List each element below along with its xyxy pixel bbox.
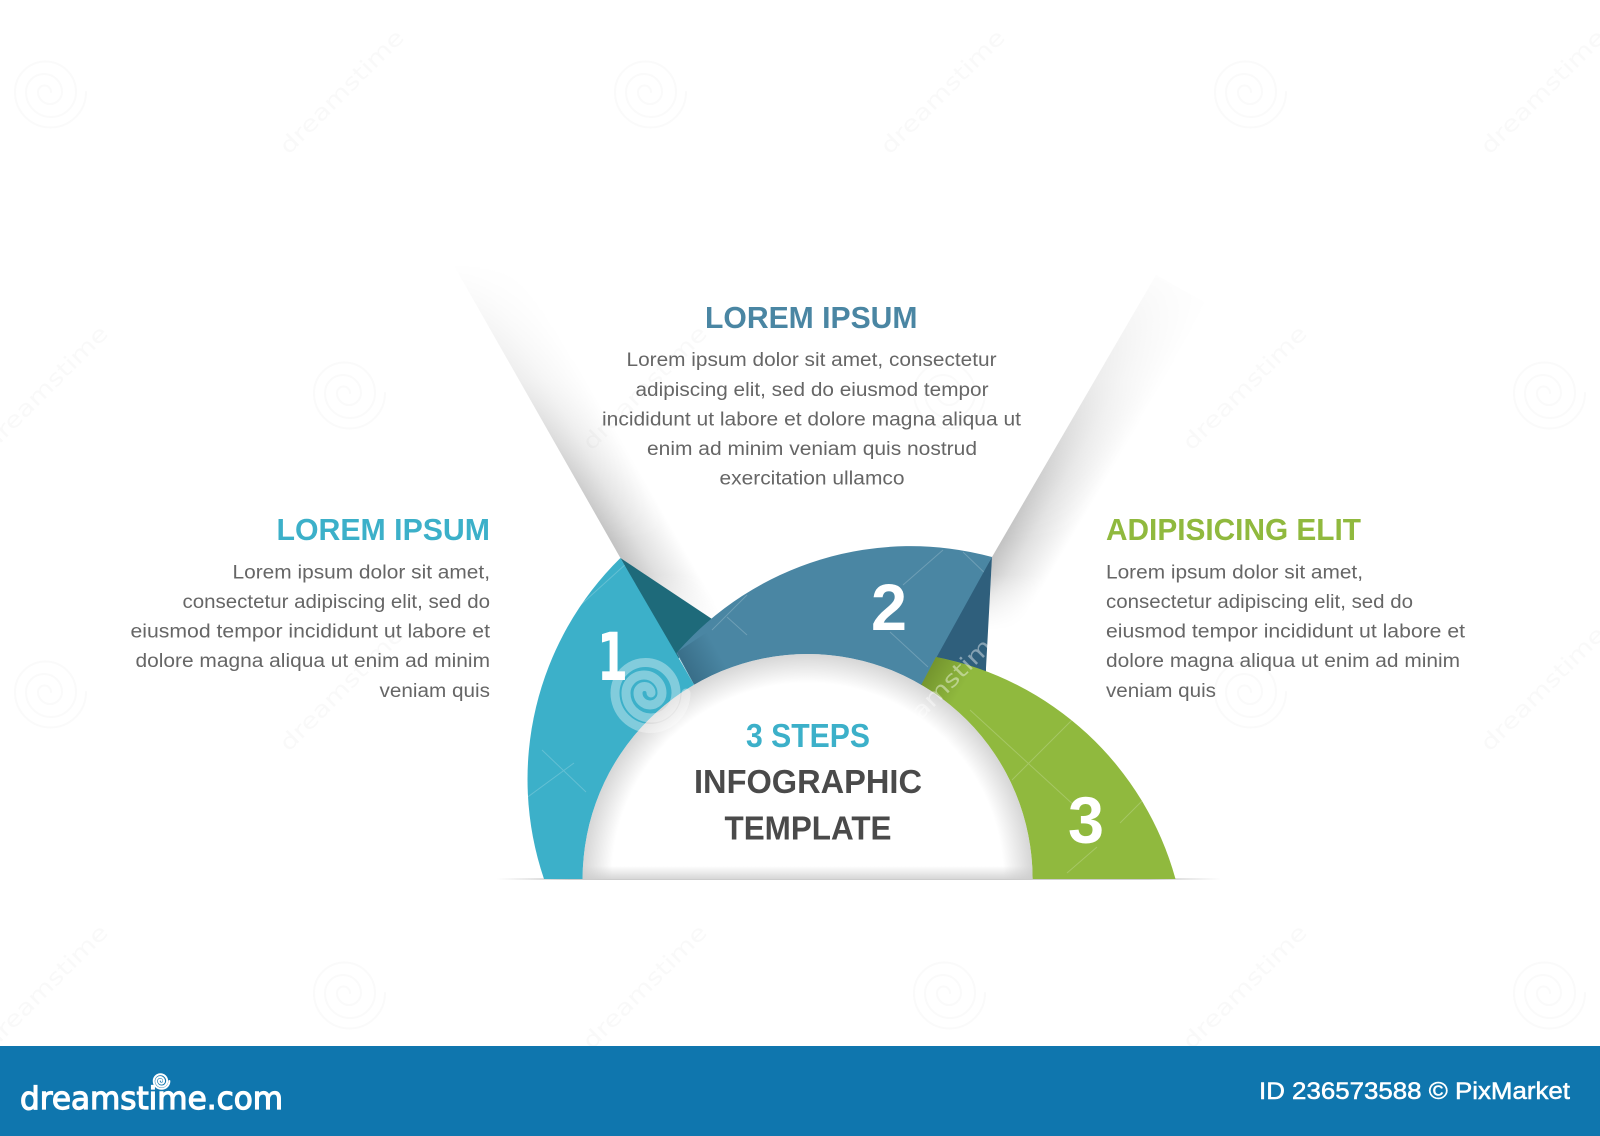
segment 2 fold shading	[677, 625, 735, 684]
step 1 heading: LOREM IPSUM	[276, 512, 490, 547]
fold: dark blue	[900, 557, 992, 700]
step 2 body: incididunt ut labore et dolore magna aliqua ut	[602, 410, 1022, 430]
footer logo text: dreamstime.com	[20, 1081, 283, 1117]
step 2 body: Lorem ipsum dolor sit amet, consectetur	[626, 350, 997, 371]
step 1 body: dolore magna aliqua ut enim ad minim	[136, 651, 490, 672]
segment 3: green	[922, 657, 1176, 879]
segment 2: blue	[676, 546, 992, 684]
step 3 body: eiusmod tempor incididunt ut labore et	[1106, 622, 1466, 642]
semicircle diagram	[514, 546, 1176, 879]
watermark text: dreamstime	[275, 25, 410, 160]
watermark text: dreamstime	[1476, 25, 1600, 160]
number 1: 1	[597, 619, 628, 696]
right fan shadow	[989, 316, 1136, 614]
step 3 body: veniam quis	[1106, 681, 1216, 702]
icon: logo spiral	[154, 1074, 169, 1089]
step 1 text block	[130, 512, 491, 702]
infographic: INFOGRAPHIC	[694, 763, 922, 800]
step 3 text block	[1106, 512, 1466, 702]
step 3 heading: ADIPISICING ELIT	[1106, 512, 1361, 547]
fold: dark teal	[620, 558, 712, 660]
watermark text on green segment: dreamstime	[875, 622, 1010, 757]
watermark text: dreamstime	[275, 622, 410, 757]
step 1 body	[130, 562, 491, 702]
footer bar	[0, 1046, 1600, 1136]
watermark text: dreamstime	[1476, 622, 1600, 757]
segment 3 fold shading	[922, 657, 975, 720]
3 steps: 3 STEPS	[746, 717, 870, 754]
step 1 body: eiusmod tempor incididunt ut labore et	[130, 622, 491, 642]
watermark text: dreamstime	[578, 920, 713, 1055]
step 3 body: consectetur adipiscing elit, sed do	[1106, 592, 1413, 613]
step 1 body: veniam quis	[380, 681, 490, 702]
watermark text: dreamstime	[1178, 920, 1313, 1055]
number 3: 3	[1068, 783, 1104, 857]
segment 1: teal	[528, 558, 694, 879]
step 2 body: adipiscing elit, sed do eiusmod tempor	[636, 380, 989, 401]
number 2: 2	[871, 570, 907, 644]
left fan shadow	[485, 320, 694, 605]
step 1 body: consectetur adipiscing elit, sed do	[182, 592, 490, 613]
step 3 body: dolore magna aliqua ut enim ad minim	[1106, 651, 1460, 672]
watermark text: dreamstime	[1178, 321, 1313, 456]
step 3 body	[1106, 562, 1466, 702]
image id and credit: ID 236573588 © PixMarket	[1259, 1078, 1570, 1105]
step 2 text block	[602, 300, 1022, 490]
watermark spiral on teal segment	[615, 663, 686, 728]
watermark text: dreamstime	[876, 25, 1011, 160]
step 2 body	[602, 350, 1022, 490]
step 2 body: enim ad minim veniam quis nostrud	[647, 439, 977, 460]
baseline shadow	[497, 878, 1221, 880]
step 2 heading: LOREM IPSUM	[705, 300, 918, 335]
template: TEMPLATE	[724, 810, 892, 846]
watermark text: dreamstime	[578, 321, 713, 456]
step 3 body: Lorem ipsum dolor sit amet,	[1106, 562, 1363, 584]
watermark hairlines on coloured segments	[514, 550, 1143, 873]
step 2 body: exercitation ullamco	[720, 468, 904, 490]
center title	[694, 717, 922, 846]
center semicircle	[582, 654, 1033, 879]
step 1 body: Lorem ipsum dolor sit amet,	[232, 562, 490, 584]
